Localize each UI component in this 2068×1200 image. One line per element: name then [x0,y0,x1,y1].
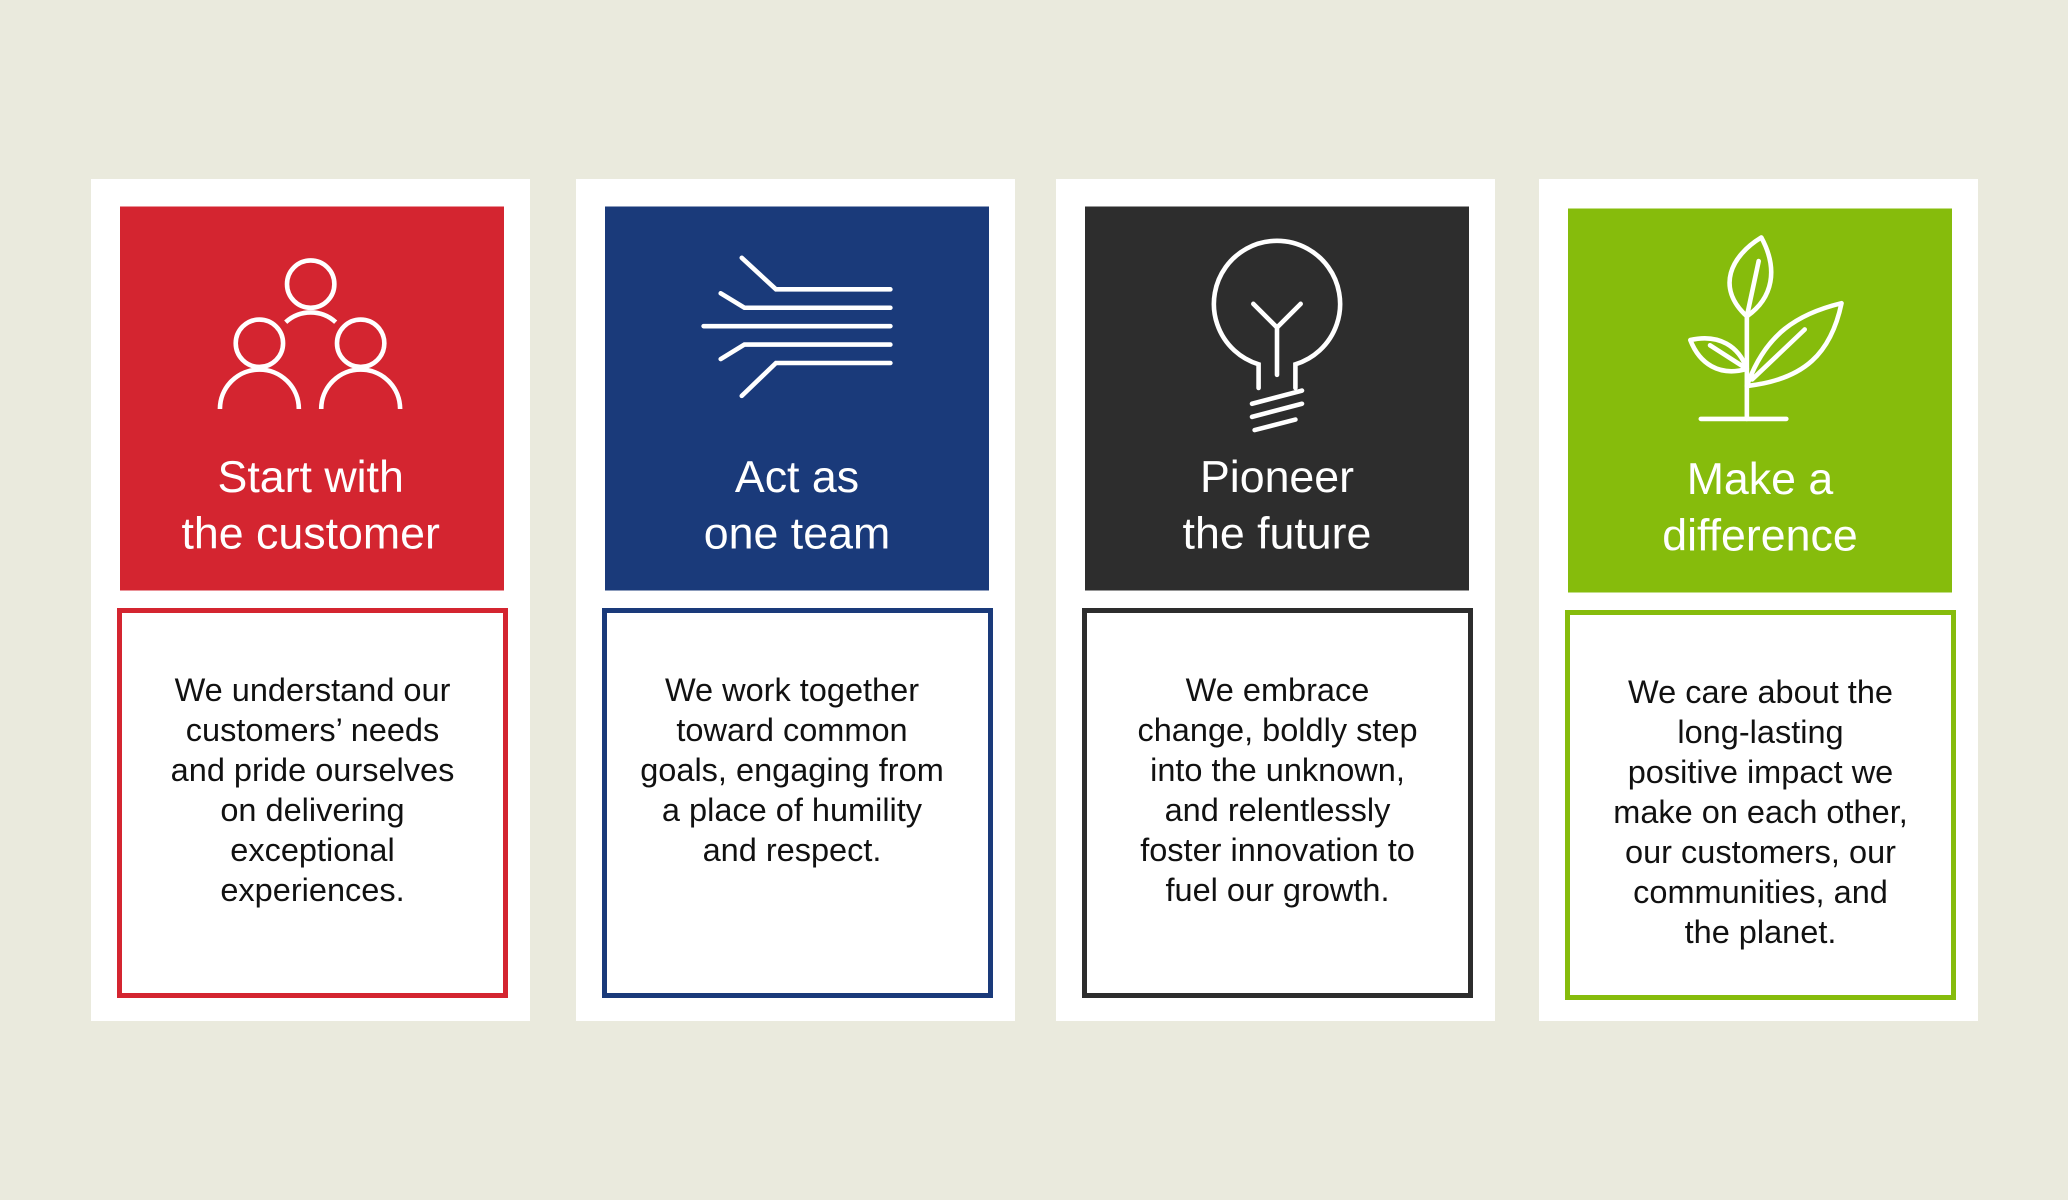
text block: long-lasting [1677,714,1844,750]
text block: exceptional [230,832,395,868]
text block: and respect. [703,832,881,868]
text block: We understand our [175,672,450,708]
text block: foster innovation to [1140,832,1415,868]
card: start with the customer [91,179,530,1021]
text block: We work together [665,672,919,708]
text block: into the unknown, [1150,752,1405,788]
text block: fuel our growth. [1165,872,1390,908]
card: make a difference [1539,179,1978,1021]
title: one team [704,509,890,558]
text block: make on each other, [1613,794,1908,830]
title: Act as [735,453,859,502]
text block: and relentlessly [1165,792,1390,828]
text block: positive impact we [1628,754,1893,790]
text block: a place of humility [662,792,922,828]
text block: our customers, our [1625,834,1896,870]
icon: people [220,260,400,409]
text block: the planet. [1685,914,1836,950]
text block: toward common [676,712,908,748]
panel: dark header [1085,206,1469,590]
text block: communities, and [1633,874,1888,910]
icon: converging lines [704,258,890,396]
card: pioneer the future [1056,179,1495,1021]
text block: on delivering [220,792,405,828]
card: act as one team [576,179,1015,1021]
title: the customer [181,509,440,558]
text block: and pride ourselves [171,752,454,788]
title: the future [1183,509,1371,558]
text block [1082,608,1473,998]
text block [117,608,508,998]
title: Start with [218,453,404,502]
text block: We care about the [1628,674,1893,710]
icon: light bulb [1214,241,1340,430]
text block [1565,610,1956,1000]
panel: green header [1568,208,1952,592]
text block: experiences. [220,872,405,908]
icon: plant [1690,237,1842,419]
panel: red header [120,206,504,590]
text block: change, boldly step [1137,712,1418,748]
title: Make a [1687,455,1833,504]
text block: goals, engaging from [640,752,944,788]
text block: We embrace [1186,672,1369,708]
title: difference [1662,511,1858,560]
panel: blue header [605,206,989,590]
text block [602,608,993,998]
text block: customers’ needs [186,712,439,748]
title: Pioneer [1200,453,1354,502]
